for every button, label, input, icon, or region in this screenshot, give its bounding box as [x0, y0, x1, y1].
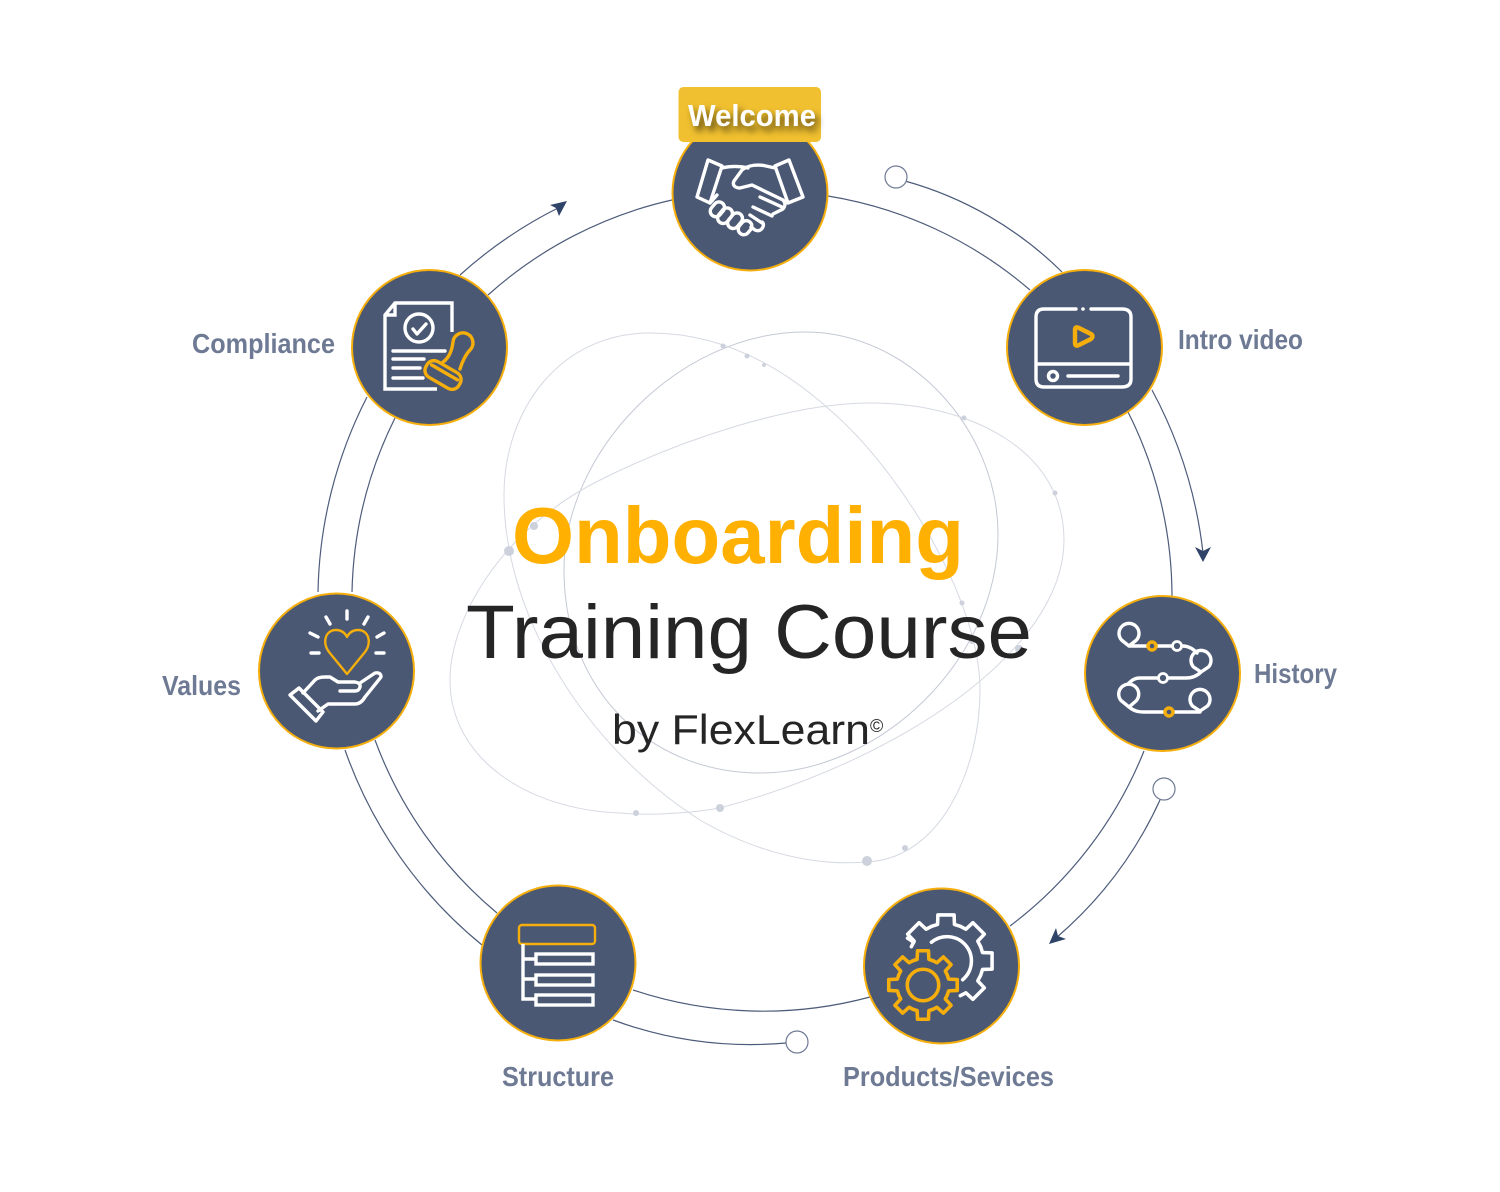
- icon: video player: [1036, 307, 1131, 387]
- arc: structure with end marker: [613, 1020, 808, 1053]
- arrow: history to products: [1049, 778, 1175, 944]
- icon: handshake: [697, 160, 803, 237]
- arrow: compliance to welcome: [460, 201, 567, 275]
- arrow: intro video to history: [1152, 390, 1211, 562]
- tag: welcome: [678, 87, 821, 142]
- step: structure: [480, 886, 636, 1040]
- label: compliance: Compliance: [192, 328, 335, 359]
- label: values: Values: [162, 670, 241, 701]
- icon: route map: [1119, 623, 1211, 716]
- subtitle: by FlexLearn: ©: [870, 716, 883, 736]
- label: structure: Structure: [502, 1061, 614, 1092]
- title: training course: Training Course: [466, 590, 1032, 675]
- main ring connecting the steps: [352, 196, 1172, 1011]
- tag: welcome: Welcome: [688, 98, 816, 133]
- arc: values to compliance: [318, 397, 367, 592]
- title: onboarding: Onboarding: [512, 491, 964, 580]
- icon: hand holding heart: [290, 611, 384, 721]
- step: intro video: [1007, 270, 1162, 425]
- icon: hierarchy list: [519, 925, 595, 1005]
- label: history: History: [1254, 658, 1337, 689]
- step: values: [259, 594, 414, 748]
- subtitle: by FlexLearn: by FlexLearn: [612, 706, 870, 753]
- arc: values to structure: [345, 750, 482, 945]
- step: history: [1085, 596, 1240, 751]
- step: welcome: [672, 116, 828, 270]
- background orbit pattern: [450, 332, 1064, 866]
- step: compliance: [352, 270, 507, 425]
- icon: gears: [889, 915, 992, 1019]
- arc: welcome to intro video with start marker: [885, 166, 1062, 272]
- label: intro video: Intro video: [1178, 324, 1303, 355]
- label: products and services: Products/Sevices: [843, 1061, 1054, 1092]
- icon: document with stamp: [385, 303, 473, 392]
- step: products and services: [864, 888, 1019, 1044]
